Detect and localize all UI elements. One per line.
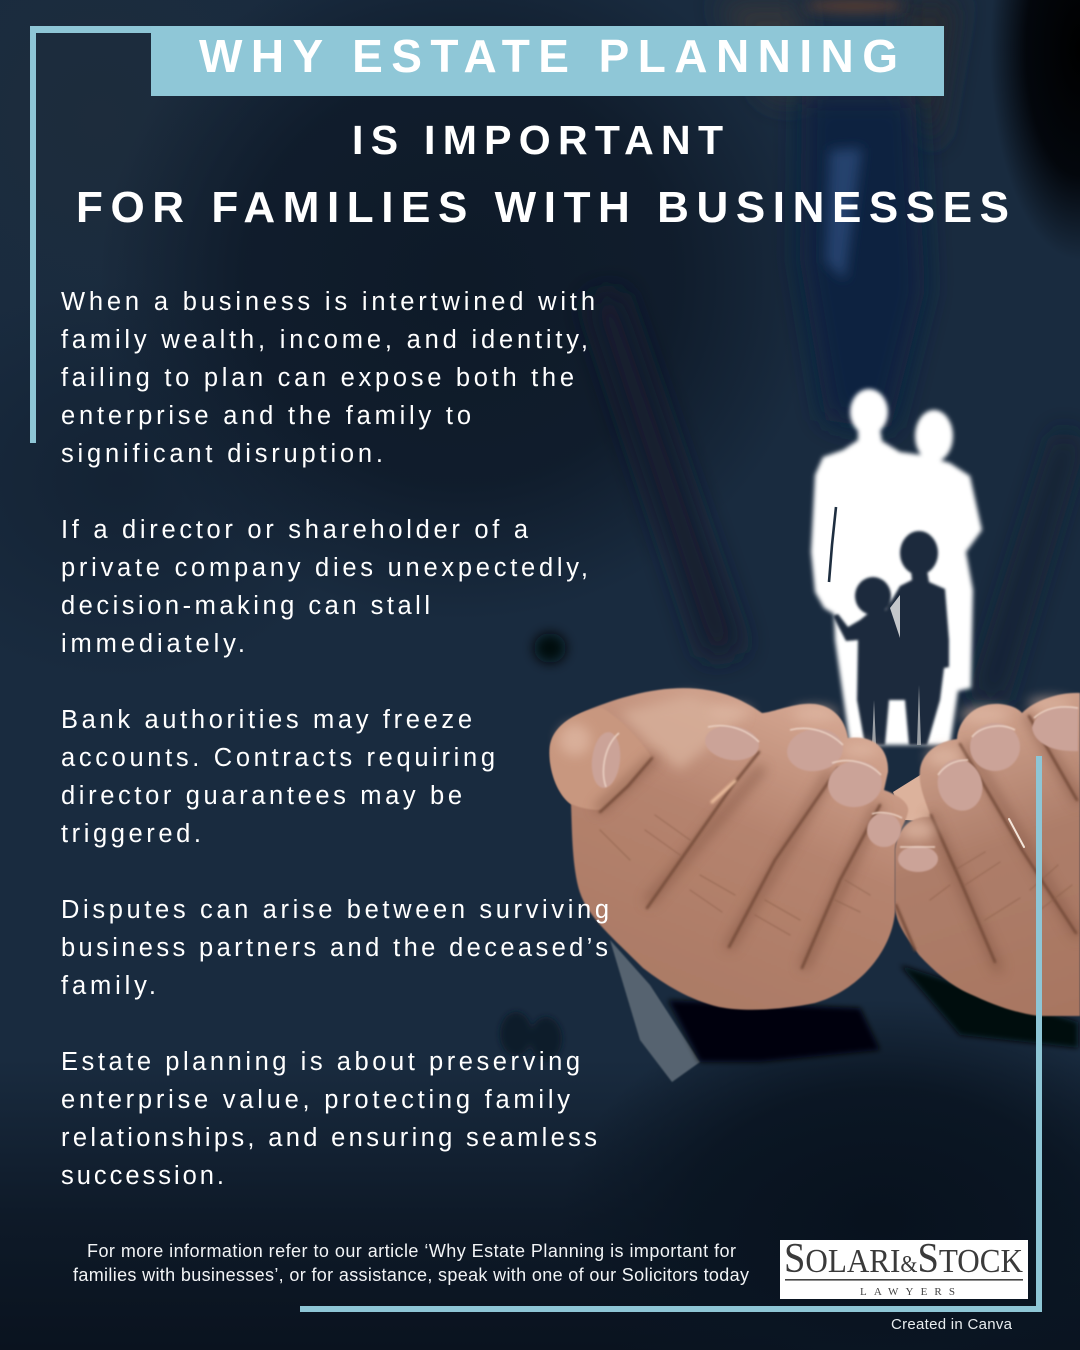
text block: paragraph 2: decision-making can stall xyxy=(61,592,430,620)
text block: paragraph 3: director guarantees may be xyxy=(61,782,462,810)
text block: paragraph 4 xyxy=(61,896,609,1000)
icon: children silhouettes xyxy=(833,531,949,745)
text block: paragraph 3: accounts. Contracts requiring xyxy=(61,744,495,772)
tie xyxy=(800,95,925,430)
palm highlight xyxy=(620,695,745,770)
lapel and fold shadows xyxy=(585,290,745,660)
curled finger xyxy=(550,708,652,810)
text block: paragraph 2: immediately. xyxy=(61,630,245,658)
credit: Created in Canva: Created in Canva xyxy=(891,1316,1013,1333)
text block: paragraph 3: triggered. xyxy=(61,820,201,848)
left nail edges xyxy=(604,726,902,818)
right fingernails xyxy=(898,707,1078,872)
footer call to action: For more information refer to our article ‘Why Estate Planning is important for xyxy=(87,1241,736,1261)
left hand creases xyxy=(600,752,880,968)
text block: paragraph 5: relationships, and ensuring seamless xyxy=(61,1124,597,1152)
text block: paragraph 1: When a business is intertwined with xyxy=(61,288,595,316)
text block: paragraph 5: enterprise value, protecting family xyxy=(61,1086,570,1114)
left fingernails xyxy=(589,722,901,847)
text block: paragraph 5 xyxy=(61,1048,597,1190)
left fingertip highlights xyxy=(559,706,878,757)
text block: paragraph 1: enterprise and the family to xyxy=(61,402,471,430)
right nail edges xyxy=(900,707,1078,847)
frame: bottom-right bracket xyxy=(300,756,1042,1312)
title xyxy=(76,30,1009,232)
text block: paragraph 5: Estate planning is about preserving xyxy=(61,1048,580,1076)
collar, shirt and neck xyxy=(716,0,810,100)
footer call to action xyxy=(73,1241,749,1285)
left hand xyxy=(550,688,908,1010)
right fingertip highlights xyxy=(900,698,1072,840)
text block: paragraph 1: family wealth, income, and identity, xyxy=(61,326,588,354)
text block: paragraph 2: If a director or shareholder of a xyxy=(61,516,529,544)
text block: paragraph 3 xyxy=(61,706,495,848)
text block: paragraph 3: Bank authorities may freeze xyxy=(61,706,472,734)
cuffs and dark sleeve openings xyxy=(610,940,700,1082)
footer call to action: families with businesses’, or for assistance, speak with one of our Solicitors today xyxy=(73,1265,749,1285)
text block: paragraph 4: business partners and the deceased’s xyxy=(61,934,608,962)
right hand xyxy=(893,693,1080,1016)
title: IS IMPORTANT xyxy=(352,117,723,163)
logo: Solari & Stock Lawyers: SOLARI&STOCK xyxy=(784,1236,1023,1282)
title: FOR FAMILIES WITH BUSINESSES xyxy=(76,183,1009,232)
text block: paragraph 1 xyxy=(61,288,595,468)
text block: paragraph 5: succession. xyxy=(61,1162,224,1190)
text block: paragraph 1: significant disruption. xyxy=(61,440,383,468)
text block: paragraph 1: failing to plan can expose both the xyxy=(61,364,574,392)
jacket buttons xyxy=(500,1012,562,1061)
text block: paragraph 2: private company dies unexpectedly, xyxy=(61,554,588,582)
text block: paragraph 4: Disputes can arise between surviving xyxy=(61,896,609,924)
text block: paragraph 4: family. xyxy=(61,972,156,1000)
logo: Solari & Stock Lawyers: LAWYERS xyxy=(860,1286,955,1298)
frame: top-left bracket xyxy=(30,26,152,443)
photo: cupped hands xyxy=(550,688,1080,1016)
right hand creases xyxy=(896,716,1078,968)
icon: white family cut-out silhouette xyxy=(811,389,982,745)
text block: paragraph 2 xyxy=(61,516,588,658)
title banner xyxy=(151,26,944,96)
title: WHY ESTATE PLANNING xyxy=(199,30,898,82)
